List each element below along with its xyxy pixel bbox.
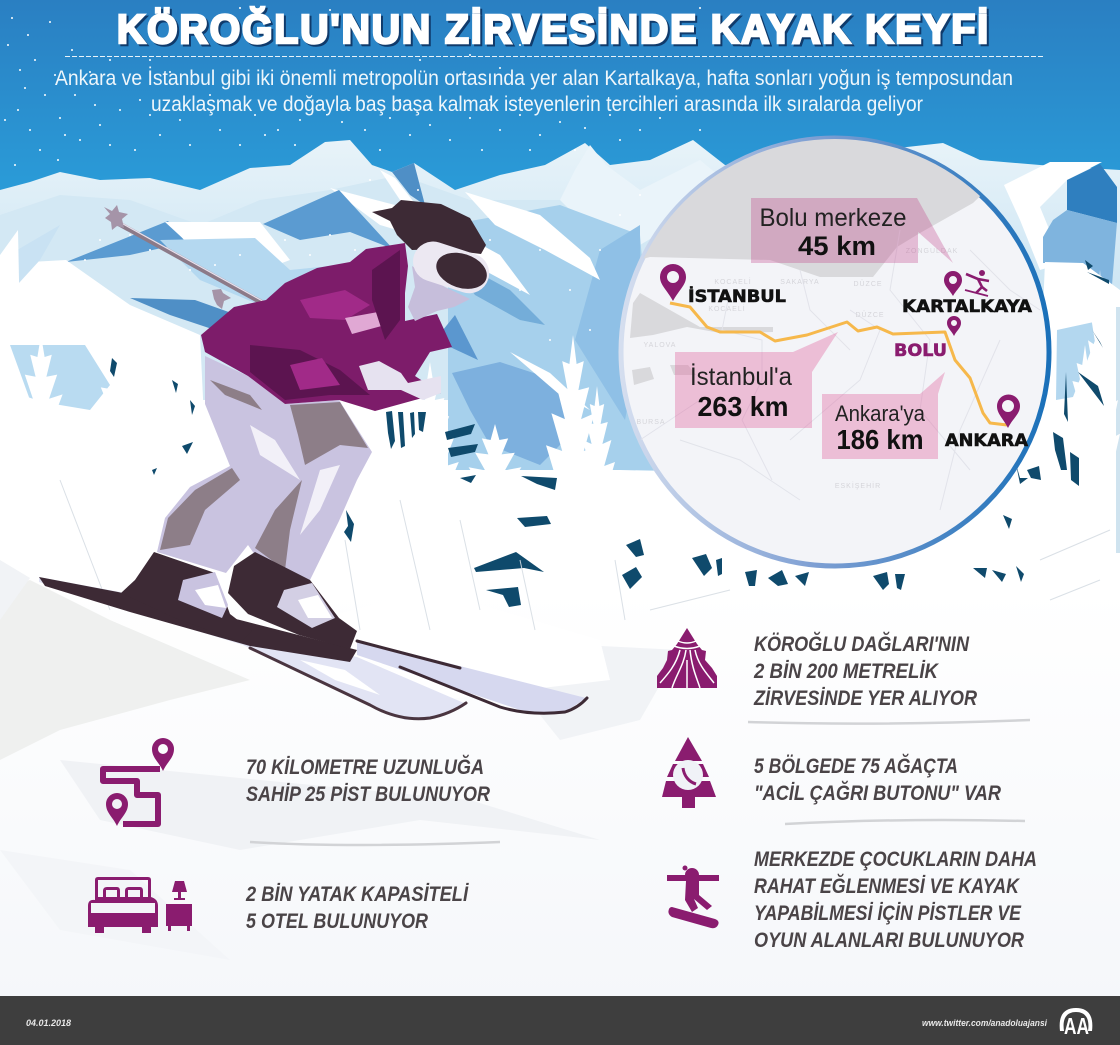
text: children area: RAHAT EĞLENMESİ VE KAYAK	[754, 873, 1020, 898]
pin: Kartalkaya	[944, 271, 962, 296]
logo: AA: AA	[1064, 1013, 1089, 1039]
goggles	[408, 236, 494, 298]
text: children area: MERKEZDE ÇOCUKLARIN DAHA	[754, 847, 1037, 871]
text: hotels: 2 BİN YATAK KAPASİTELİ	[245, 882, 469, 906]
map region labels	[636, 248, 958, 490]
ski poles	[104, 205, 268, 309]
mountain illustration background	[0, 140, 1120, 610]
front ski	[39, 577, 464, 720]
map region labels: ESKİŞEHİR	[835, 481, 881, 490]
snowy foreground	[0, 560, 1120, 1000]
text: summit: 2 BİN 200 METRELİK	[753, 659, 939, 683]
text: pistes: SAHİP 25 PİST BULUNUYOR	[246, 782, 490, 806]
sky background	[0, 0, 1120, 300]
ski pants	[157, 356, 372, 580]
text: summit: ZİRVESİNDE YER ALIYOR	[753, 686, 977, 710]
text: summit	[753, 631, 977, 710]
text: hotels	[245, 882, 469, 933]
label: Bolu: BOLU	[894, 341, 947, 361]
icon: bed and nightstand	[88, 877, 192, 933]
route line	[670, 303, 1007, 425]
skier	[39, 200, 587, 720]
callout: Bolu merkeze: Bolu merkeze	[760, 204, 906, 232]
text: emergency button: 5 BÖLGEDE 75 AĞAÇTA	[754, 753, 958, 778]
map circle	[600, 120, 1060, 566]
callout: Ankara'ya	[822, 372, 945, 459]
callout: Bolu merkeze: 45 km	[798, 231, 876, 261]
ski boots	[121, 552, 252, 642]
pin: İstanbul	[660, 264, 686, 301]
icon: route with pins	[103, 738, 174, 826]
map region labels: DÜZCE	[853, 280, 883, 288]
icon: snowboarder	[667, 866, 719, 928]
hair	[372, 200, 486, 254]
callout: İstanbul'a: 263 km	[698, 391, 788, 422]
title divider	[65, 56, 1045, 58]
text: hotels: 5 OTEL BULUNUYOR	[246, 909, 428, 933]
map region labels: SAKARYA	[780, 279, 820, 286]
callout: Ankara'ya: Ankara'ya	[835, 401, 926, 426]
map region labels: KOCAELİ	[714, 277, 752, 286]
callout: Ankara'ya: 186 km	[836, 424, 924, 455]
map region labels: YALOVA	[644, 342, 676, 349]
gloves	[359, 361, 441, 400]
map region labels: KOCAELİ	[708, 304, 746, 313]
icon: skier	[965, 270, 989, 296]
icon: tree with phone	[662, 737, 716, 808]
callout: Bolu merkeze	[751, 198, 953, 263]
text: pistes	[246, 754, 490, 806]
intro text: Ankara ve İstanbul gibi iki önemli metropolün ortasında yer alan Kartalkaya, hafta sonları yoğun iş temposundan	[55, 67, 1013, 90]
text: summit: KÖROĞLU DAĞLARI'NIN	[754, 631, 969, 656]
callout: İstanbul'a: İstanbul'a	[690, 362, 792, 391]
intro text	[55, 67, 1013, 116]
text: children area: OYUN ALANLARI BULUNUYOR	[754, 928, 1024, 952]
map region labels: ZONGULDAK	[906, 248, 958, 255]
black sea and marmara	[630, 139, 1040, 510]
label: Kartalkaya: KARTALKAYA	[902, 297, 1033, 317]
label: Ankara: ANKARA	[945, 431, 1029, 451]
logo: AA	[1060, 1008, 1092, 1039]
pin: Bolu	[947, 316, 961, 336]
callout: İstanbul'a	[675, 332, 838, 428]
pin: Ankara	[997, 394, 1020, 428]
text: pistes: 70 KİLOMETRE UZUNLUĞA	[246, 754, 484, 779]
map disc	[621, 138, 1049, 566]
title: KÖROĞLU'NUN ZİRVESİNDE KAYAK KEYFİ	[117, 6, 990, 52]
map region labels: BURSA	[636, 419, 666, 426]
footer bar	[0, 996, 1120, 1045]
intro text: uzaklaşmak ve doğayla baş başa kalmak isteyenlerin tercihleri arasında ilk sıralarda geliyor	[151, 93, 923, 116]
date: 04.01.2018	[26, 1018, 71, 1028]
right-hand ridge	[1004, 162, 1102, 270]
purple jacket	[201, 243, 452, 411]
twitter address: www.twitter.com/anadoluajansi	[922, 1018, 1047, 1029]
map region labels: DÜZCE	[855, 311, 885, 319]
dark tree shadows	[60, 260, 1110, 630]
text: children area	[754, 847, 1037, 952]
icon: mountain peak	[657, 628, 717, 688]
text: children area: YAPABİLMESİ İÇİN PİSTLER VE	[754, 901, 1022, 925]
rear ski	[357, 640, 586, 713]
text: emergency button	[754, 753, 1001, 805]
snowfall	[5, 8, 700, 340]
label: İstanbul: İSTANBUL	[688, 285, 786, 307]
text: emergency button: "ACİL ÇAĞRI BUTONU" VAR	[754, 780, 1001, 805]
face	[408, 266, 470, 321]
snow covered trees	[5, 270, 1120, 567]
